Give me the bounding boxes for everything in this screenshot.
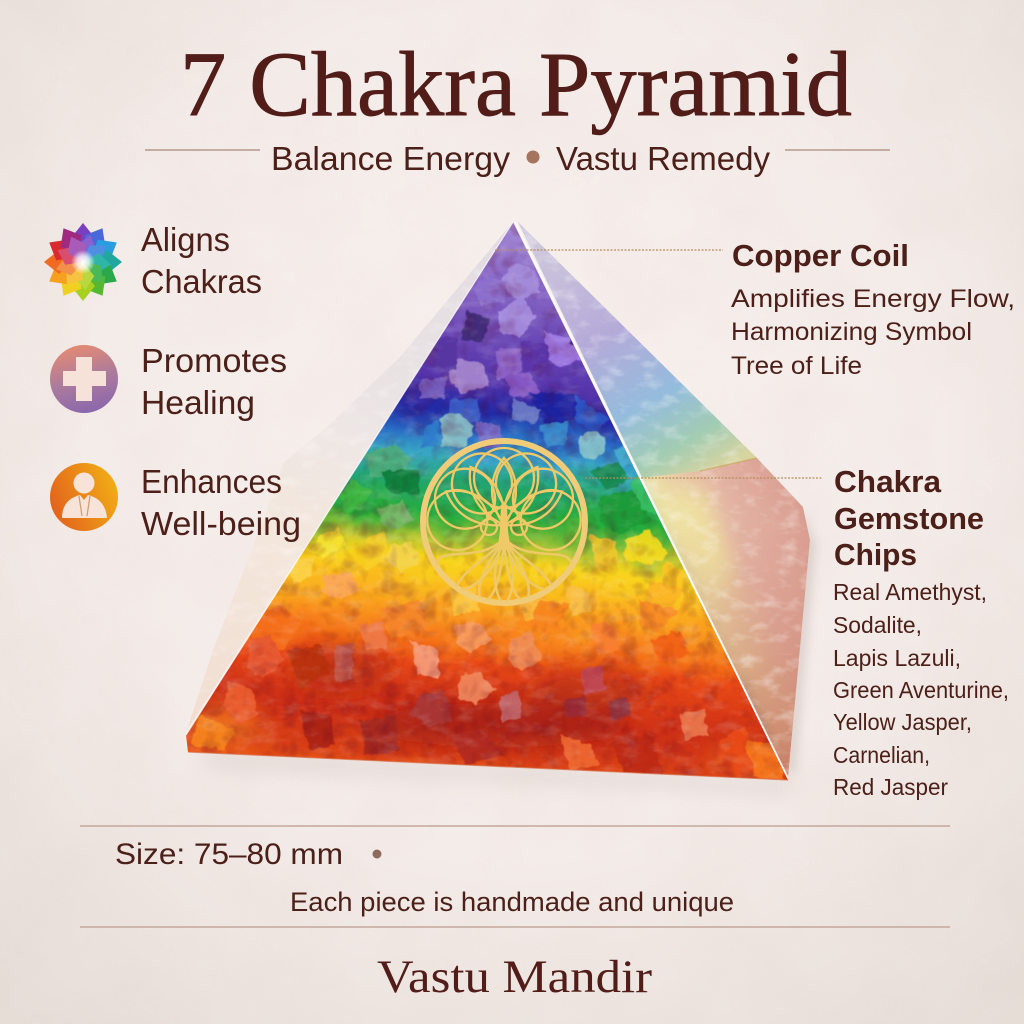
callout heading: Copper Coil bbox=[732, 238, 909, 273]
handmade note: Each piece is handmade and unique bbox=[290, 887, 734, 917]
gemstone list: Lapis Lazuli, bbox=[833, 645, 961, 671]
tree of life medallion bbox=[423, 441, 585, 606]
callout text bbox=[731, 285, 1015, 380]
brand: Vastu Mandir bbox=[377, 951, 652, 1003]
callout heading: Chips bbox=[834, 537, 917, 572]
gemstone list: Sodalite, bbox=[833, 612, 922, 638]
benefit: enhances well-being bbox=[50, 463, 301, 542]
pyramid edges bbox=[186, 222, 788, 780]
pyramid shadow bbox=[200, 510, 816, 792]
medallion ring bbox=[423, 441, 585, 603]
label: enhances well-being bbox=[141, 463, 301, 542]
subtitle: Vastu Remedy bbox=[556, 140, 771, 177]
callout heading: Chakra bbox=[834, 464, 942, 499]
label: enhances well-being: Well-being bbox=[141, 505, 301, 542]
subtitle: Balance Energy bbox=[271, 140, 511, 177]
chip texture bbox=[180, 215, 800, 785]
label: promotes healing: Healing bbox=[141, 384, 255, 421]
gemstone list: Red Jasper bbox=[833, 774, 948, 800]
yellow jasper chips bbox=[285, 528, 688, 622]
icon: chakra lotus bbox=[43, 222, 123, 302]
callout leader bbox=[495, 249, 723, 251]
callout text: Tree of Life bbox=[731, 352, 862, 380]
callout: chakra gemstone chips bbox=[585, 464, 1009, 800]
tree canopy bbox=[423, 443, 585, 553]
callout text: Harmonizing Symbol bbox=[731, 318, 972, 346]
subtitle bbox=[145, 140, 890, 177]
tree trunk bbox=[496, 505, 512, 550]
right glass face bbox=[510, 215, 820, 785]
callout text: Amplifies Energy Flow, bbox=[731, 285, 1015, 313]
callout heading bbox=[834, 464, 984, 572]
label: aligns chakras: Chakras bbox=[141, 263, 262, 300]
amethyst chips bbox=[420, 262, 592, 398]
label: promotes healing: Promotes bbox=[141, 342, 287, 379]
carnelian chips bbox=[248, 572, 690, 678]
gemstone list: Green Aventurine, bbox=[833, 677, 1009, 703]
label: promotes healing bbox=[141, 342, 287, 421]
gemstone list bbox=[833, 579, 1009, 800]
red jasper chips bbox=[190, 635, 785, 780]
left glass face bbox=[180, 215, 520, 735]
benefit: promotes healing bbox=[50, 342, 287, 421]
icon: person bbox=[50, 463, 118, 531]
gemstone list: Yellow Jasper, bbox=[833, 709, 972, 735]
tree roots bbox=[436, 542, 572, 602]
benefit: aligns chakras bbox=[43, 221, 262, 302]
sodalite and lapis chips bbox=[422, 392, 637, 468]
front gemstone face bbox=[186, 222, 788, 780]
gemstone list: Carnelian, bbox=[833, 742, 930, 768]
icon: healing cross bbox=[50, 345, 118, 413]
label: aligns chakras bbox=[141, 221, 262, 300]
deep red shading bbox=[190, 648, 775, 774]
callout heading: Gemstone bbox=[834, 501, 984, 536]
gemstone list: Real Amethyst, bbox=[833, 579, 987, 605]
callout leader bbox=[585, 477, 822, 479]
title: 7 Chakra Pyramid bbox=[180, 33, 852, 135]
label: aligns chakras: Aligns bbox=[141, 221, 230, 258]
label: enhances well-being: Enhances bbox=[141, 463, 282, 500]
size spec: Size: 75–80 mm bbox=[115, 838, 343, 871]
green aventurine chips bbox=[340, 442, 660, 535]
callout: copper coil bbox=[495, 238, 1015, 380]
pyramid bbox=[150, 200, 830, 800]
gem chips bbox=[190, 262, 785, 780]
